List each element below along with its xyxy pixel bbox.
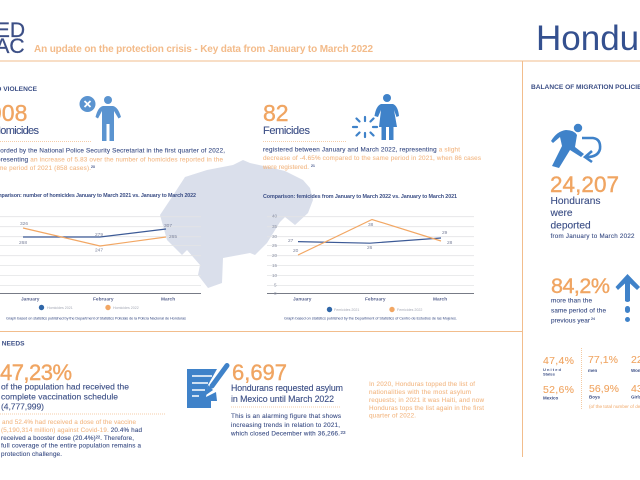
source note: Graph based on statistics published by the Department of Statistics Policiais de la Policía Nacional de Honduras xyxy=(6,316,186,320)
icon: woman with burst xyxy=(353,94,399,140)
axis ticks: 20 xyxy=(272,253,278,258)
axis months: February xyxy=(93,296,114,302)
data labels: 38 xyxy=(368,222,374,228)
axis ticks: 0 xyxy=(274,291,277,296)
breakdown by destination: United xyxy=(543,367,562,372)
stat: vaccination: (4,777,999) xyxy=(1,402,44,412)
axis months xyxy=(293,296,447,302)
axis ticks: 5 xyxy=(274,282,277,288)
text: vaccination detail xyxy=(1,419,142,458)
header divider xyxy=(0,60,640,62)
stat: asylum: in Mexico until March 2022 xyxy=(231,394,334,404)
panel divider xyxy=(0,61,523,457)
icon: deported person xyxy=(551,124,600,168)
text: homicides description: 20 xyxy=(91,165,95,169)
panel: violence xyxy=(0,86,481,320)
data labels: 27 xyxy=(288,238,294,244)
text: asylum detail: 23 xyxy=(340,430,346,435)
data labels: 268 xyxy=(19,240,27,246)
data labels: 326 xyxy=(20,221,28,227)
text: vaccination detail: full coverage of the entire population remains a xyxy=(1,442,141,450)
line: femicides 2021 xyxy=(298,238,441,243)
data labels: 20 xyxy=(293,248,299,254)
text: asylum context: Honduras tops the list again in the first xyxy=(369,405,484,412)
axis ticks: 10 xyxy=(272,273,278,278)
axis ticks: 30 xyxy=(272,234,278,239)
text: asylum detail: which closed December with 36,266. xyxy=(230,430,340,438)
text: asylum context: nationalities with the most asylum xyxy=(369,389,471,396)
source note: Graph based on statistics published by the Department of Statistics of Centro de Estudios de las Mujeres. xyxy=(284,316,457,320)
data labels: 279 xyxy=(95,232,103,238)
breakdown by destination: Mexico xyxy=(543,396,559,400)
axis ticks: 15 xyxy=(272,263,278,268)
stat: vaccination: 47,23% xyxy=(0,360,72,385)
stat: deportations: 24,207 xyxy=(550,172,619,197)
axis months: February xyxy=(365,296,386,302)
text: asylum context: quarter of 2022. xyxy=(369,412,416,420)
text: asylum detail: increasing trends in relation to 2021, xyxy=(231,422,340,429)
data labels: 29 xyxy=(442,230,448,236)
text: vaccination detail: and 52.4% had received a dose of the vaccine xyxy=(2,419,136,426)
text: femicides description: registered between January and March 2022, representing a slight xyxy=(263,146,460,154)
stat: femicides: 82 xyxy=(263,100,289,126)
legend: Femicides 2022 xyxy=(397,308,422,312)
breakdown by age and gender: 56,9% xyxy=(589,383,619,395)
stat: percentage increase: 84,2% xyxy=(551,274,610,298)
legend xyxy=(39,305,139,310)
text: vaccination detail: received a booster dose (20.4%)²². Therefore, xyxy=(1,435,134,442)
axis ticks: 40 xyxy=(272,214,278,218)
text: asylum detail: This is an alarming figure that shows xyxy=(231,413,341,420)
breakdown by age and gender: 77,1% xyxy=(588,354,618,366)
breakdown by destination xyxy=(543,355,574,400)
stat: deportations: from January to March 2022 xyxy=(550,233,635,240)
text: asylum context xyxy=(369,381,484,420)
axis ticks: 25 xyxy=(272,243,278,248)
breakdown by age and gender: men xyxy=(588,368,598,373)
stat: asylum xyxy=(231,360,343,407)
line: homicides 2022 xyxy=(23,228,166,246)
data labels: 265 xyxy=(169,234,177,240)
stat: asylum: 6,697 xyxy=(232,360,287,385)
icon: up arrow xyxy=(616,274,640,322)
map of Honduras xyxy=(160,160,313,288)
axis months xyxy=(21,296,175,302)
text: vaccination detail: protection challenge. xyxy=(1,451,62,458)
data labels: 26 xyxy=(367,245,373,251)
text: femicides description: were registered. xyxy=(262,164,309,171)
stat: vaccination: complete vaccination schedule xyxy=(1,392,118,402)
data labels: 247 xyxy=(95,248,103,254)
stat: percentage increase xyxy=(551,274,610,324)
data labels xyxy=(288,222,453,254)
stat: asylum: Hondurans requested asylum xyxy=(231,383,343,393)
text: asylum context: requests; in 2021 it was Haiti, and now xyxy=(369,397,484,404)
stat: deportations: deported xyxy=(550,220,591,232)
text: vaccination detail: (5,190,314 million) against Covid-19. 20.4% had xyxy=(1,427,142,434)
stat: deportations xyxy=(550,172,635,240)
axis ticks xyxy=(272,214,278,296)
text: femicides description: decrease of -4.65% compared to the same period in 2021, when 86 cases xyxy=(263,155,481,162)
icon: man with cross xyxy=(80,96,121,141)
text: homicides description xyxy=(0,148,225,172)
line: homicides 2021 xyxy=(23,229,166,237)
axis months: January xyxy=(21,296,40,302)
logo xyxy=(0,19,25,58)
breakdown by destination: States xyxy=(543,372,556,376)
axis months: January xyxy=(293,296,312,302)
stat: percentage increase: 24 xyxy=(591,317,595,321)
icon: asylum form xyxy=(187,366,227,408)
legend: Homicides 2021 xyxy=(47,306,73,310)
chart: femicides xyxy=(263,194,474,320)
stat: homicides xyxy=(0,100,92,142)
subtitle: An update on the protection crisis - Key data from January to March 2022 xyxy=(34,44,373,55)
line: femicides 2022 xyxy=(298,220,441,255)
data labels xyxy=(19,221,177,254)
panel: needs xyxy=(0,340,484,458)
panel: migration policies xyxy=(531,84,640,410)
breakdown by destination: 47,4% xyxy=(543,355,574,367)
text: femicides description xyxy=(262,146,481,171)
stat: percentage increase: same period of the xyxy=(551,308,606,314)
stat: femicides: Femicides xyxy=(263,125,310,137)
legend: Homicides 2022 xyxy=(113,306,139,310)
chart title: Comparison: femicides from January to March 2022 vs. January to March 2021 xyxy=(263,194,457,200)
stat: vaccination: of the population had received the xyxy=(1,382,129,392)
stat: deportations: were xyxy=(550,208,573,219)
stat: vaccination xyxy=(0,360,166,414)
data labels: 28 xyxy=(447,240,453,246)
axis months: March xyxy=(161,296,175,302)
axis months: March xyxy=(433,296,447,302)
legend: Femicides 2021 xyxy=(334,308,359,312)
legend xyxy=(327,307,422,312)
stat: deportations: Hondurans xyxy=(550,196,600,207)
text: femicides description: 21 xyxy=(311,164,315,168)
chart: homicides xyxy=(0,193,201,320)
breakdown by age and gender xyxy=(588,354,640,409)
data labels: 307 xyxy=(164,223,172,229)
text: asylum detail xyxy=(230,413,346,438)
text: asylum context: In 2020, Honduras topped the list of xyxy=(369,381,475,388)
stat: femicides xyxy=(263,100,347,142)
breakdown by age and gender: Boys xyxy=(589,394,601,400)
stat: percentage increase: previous year xyxy=(551,318,591,324)
stat: percentage increase: more than the xyxy=(551,298,592,304)
breakdown by destination: 52,6% xyxy=(543,384,574,396)
axis ticks: 35 xyxy=(272,224,278,229)
